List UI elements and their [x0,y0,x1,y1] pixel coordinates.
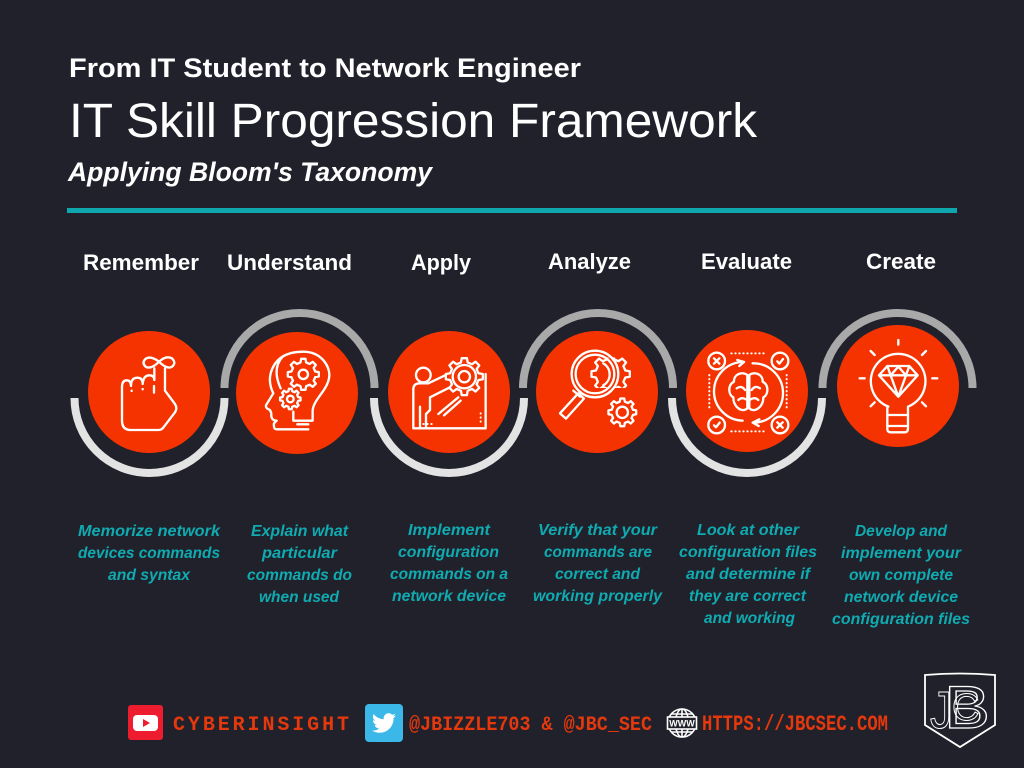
description: apply: Implement [408,522,491,539]
header [67,53,957,213]
icon: create diamond bulb [837,325,959,447]
description: understand: Explain what [251,523,349,540]
description: understand [247,523,352,606]
description: remember: Memorize network [78,523,221,540]
website url: HTTPS://JBCSEC.COM [702,712,888,737]
description: analyze: commands are [544,544,652,561]
description: evaluate: they are correct [689,588,807,605]
icon: understand head with gears [236,332,358,454]
logo: JBC shield: J [930,682,952,740]
description: create: Develop and [855,523,948,540]
arc 4 [523,313,673,388]
teal divider [67,208,957,213]
description: remember [78,523,221,584]
arc 5 [672,398,822,473]
description: create: implement your [841,545,962,562]
icon: globe [668,709,696,737]
description: create: configuration files [832,611,970,628]
youtube channel name: CYBERINSIGHT [173,714,349,737]
logo: JBC shield: B [944,674,990,741]
heading: analyze: Analyze [548,249,631,274]
subtitle: Applying Bloom's Taxonomy [67,157,434,187]
icon: globe: WWW [669,718,695,728]
description: evaluate [679,522,817,627]
arc 1 [74,398,224,473]
connecting arcs [74,313,972,473]
heading: apply: Apply [411,250,472,275]
description: understand: when used [259,589,340,606]
eyebrow heading: From IT Student to Network Engineer [69,53,582,83]
description: create: network device [844,589,958,606]
description: analyze: working properly [533,588,663,605]
icon: twitter [365,704,403,742]
arc 3 [374,398,524,473]
logo: JBC shield: C [952,687,979,729]
description: apply: network device [392,588,506,605]
description: analyze [533,522,663,605]
description: apply [390,522,508,605]
description: remember: devices commands [78,545,220,562]
description: evaluate: configuration files [679,544,817,561]
description: analyze: correct and [555,566,641,583]
stage headings [83,249,936,275]
icon: analyze magnifier [536,331,658,453]
heading: create: Create [866,249,936,274]
description: understand: commands do [247,567,352,584]
main title: IT Skill Progression Framework [69,95,758,148]
icon: youtube [128,705,163,740]
icon: apply climber with gear [388,331,510,453]
description: create: own complete [849,567,953,584]
arc 6 [822,313,972,388]
description: evaluate: Look at other [697,522,800,539]
description: remember: and syntax [108,567,191,584]
twitter handles: @JBIZZLE703 & @JBC_SEC [409,714,652,737]
description: create [832,523,970,628]
heading: evaluate: Evaluate [701,249,792,274]
icon: evaluate brain [686,330,808,452]
description: evaluate: and determine if [686,566,812,583]
description: analyze: Verify that your [538,522,658,539]
heading: understand: Understand [227,250,352,275]
description: apply: commands on a [390,566,508,583]
description: understand: particular [261,545,338,562]
heading: remember: Remember [83,250,199,275]
description: evaluate: and working [704,610,795,627]
logo: JBC shield [925,674,995,747]
description: apply: configuration [398,544,499,561]
icon: remember hand [88,331,210,453]
arc 2 [224,313,374,388]
